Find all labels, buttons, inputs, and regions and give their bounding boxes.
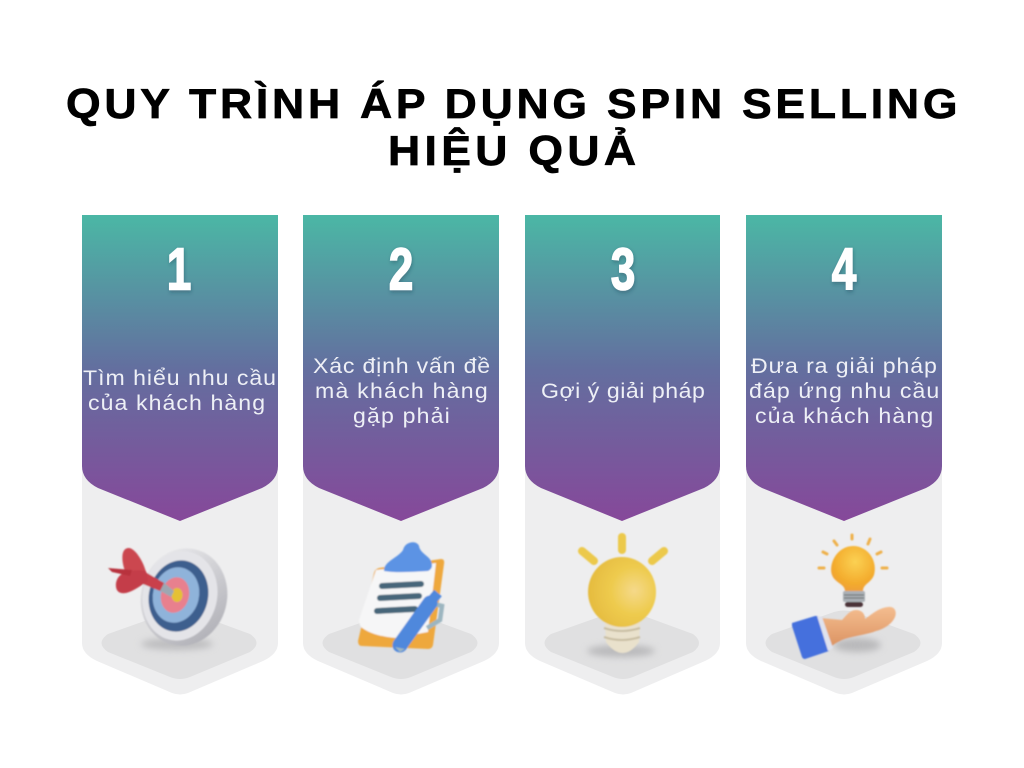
- description: [83, 366, 276, 415]
- icon: dartboard: [108, 539, 238, 655]
- gradient banner: [746, 215, 942, 521]
- description: Gợi ý giải pháp: [541, 379, 705, 403]
- platform: [322, 610, 478, 679]
- gradient banner: [525, 215, 720, 521]
- number: 3: [611, 237, 635, 303]
- number: 4: [832, 237, 856, 303]
- title: [66, 81, 957, 175]
- panel: step 4: [746, 215, 942, 694]
- panel background: [746, 440, 942, 694]
- description: đáp ứng nhu cầu: [749, 379, 939, 403]
- number: 2: [389, 237, 413, 303]
- panel background: [525, 440, 720, 694]
- description: gặp phải: [353, 404, 450, 428]
- platform: [544, 610, 699, 679]
- description: Xác định vấn đề: [313, 354, 490, 378]
- title: HIỆU QUẢ: [388, 127, 636, 175]
- description: Đưa ra giải pháp: [751, 354, 937, 378]
- description: [313, 354, 490, 428]
- description: mà khách hàng: [315, 379, 488, 403]
- description: của khách hàng: [755, 404, 933, 428]
- description: của khách hàng: [88, 391, 265, 415]
- gradient banner: [82, 215, 278, 521]
- panel: step 3: [525, 215, 720, 694]
- icon: clipboard: [358, 542, 444, 652]
- icon: light bulb: [582, 537, 664, 657]
- icon: hand holding light bulb: [792, 535, 896, 659]
- platform: [102, 610, 256, 679]
- description: Tìm hiểu nhu cầu: [83, 366, 276, 390]
- panel: step 2: [303, 215, 499, 694]
- description: [749, 354, 939, 428]
- platform: [766, 610, 920, 679]
- title: QUY TRÌNH ÁP DỤNG SPIN SELLING: [66, 81, 957, 128]
- panel background: [82, 440, 278, 694]
- panel background: [303, 440, 499, 694]
- gradient banner: [303, 215, 499, 521]
- panel: step 1: [82, 215, 278, 694]
- number: 1: [167, 237, 191, 303]
